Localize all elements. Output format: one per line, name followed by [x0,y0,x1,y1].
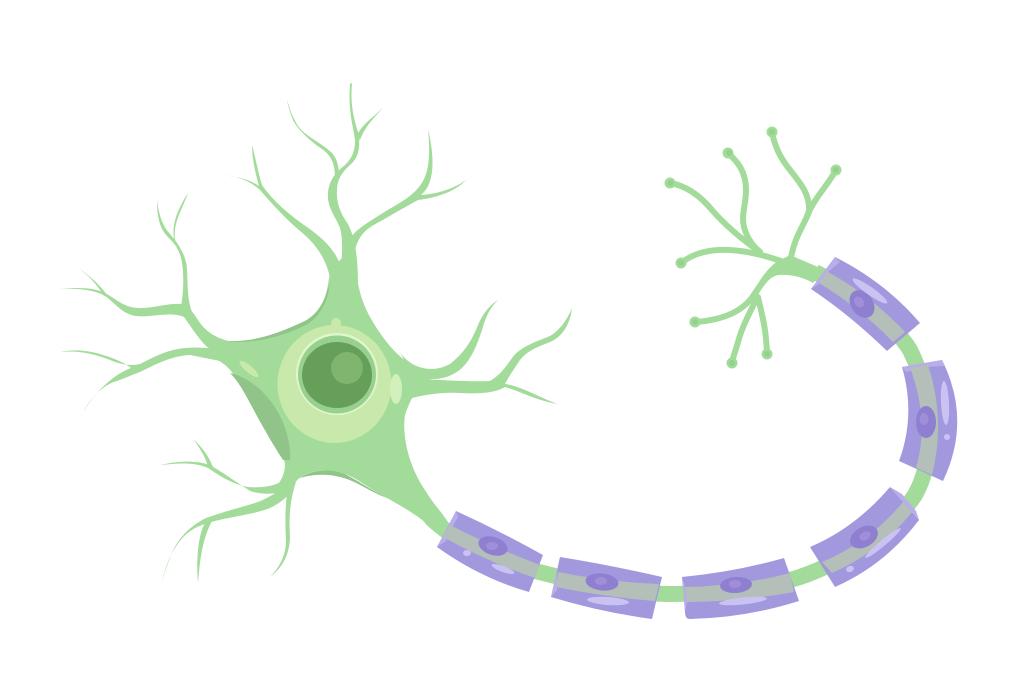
cytoplasm [278,325,392,443]
body shadows [228,285,387,498]
dendrites: left tree [60,193,232,412]
nucleolus [331,352,363,384]
myelin sheath segment 3 [682,558,799,619]
axon terminal branches [670,133,836,363]
myelin sheath segment 2 [551,557,662,619]
dendrites: lower left tree [160,439,296,592]
nucleus [296,333,378,415]
cell body [212,258,448,533]
myelin sheath segment 4 [810,487,919,587]
dendrites: top tree [223,83,466,285]
axon [418,272,929,594]
body highlights [238,318,402,404]
myelin sheath segment 5 [899,360,957,481]
dendrites: right tree [400,300,572,404]
synaptic knobs [664,126,842,368]
myelin sheath segment 6 [811,257,920,351]
terminal hub [754,255,825,295]
myelin sheath segment 1 [437,511,543,592]
